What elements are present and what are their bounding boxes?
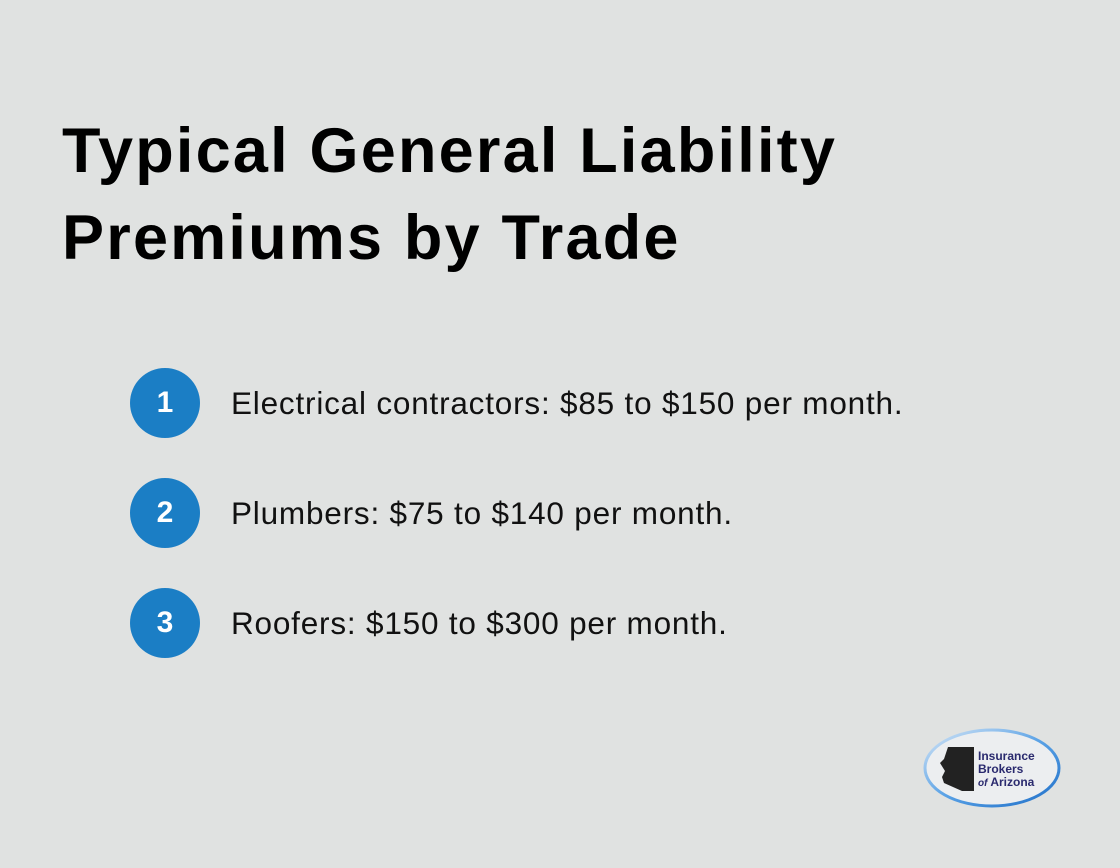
logo: Brokers [978, 762, 1024, 776]
badge 2 [130, 478, 200, 548]
title: Typical General Liability [62, 116, 837, 186]
title: Premiums by Trade [62, 203, 681, 273]
badge 1: 1 [157, 386, 173, 419]
badge 3 [130, 588, 200, 658]
logo: Insurance [978, 749, 1035, 763]
item 1 [130, 368, 903, 438]
title [62, 116, 837, 273]
item 3 [130, 588, 728, 658]
badge 3: 3 [157, 606, 173, 639]
logo: of Arizona [978, 775, 1035, 789]
item 2 [130, 478, 733, 548]
badge 2: 2 [157, 496, 173, 529]
text 1: Electrical contractors: $85 to $150 per month. [231, 385, 903, 421]
text 3: Roofers: $150 to $300 per month. [231, 605, 728, 641]
badge 1 [130, 368, 200, 438]
text 2: Plumbers: $75 to $140 per month. [231, 495, 733, 531]
logo [924, 728, 1060, 808]
